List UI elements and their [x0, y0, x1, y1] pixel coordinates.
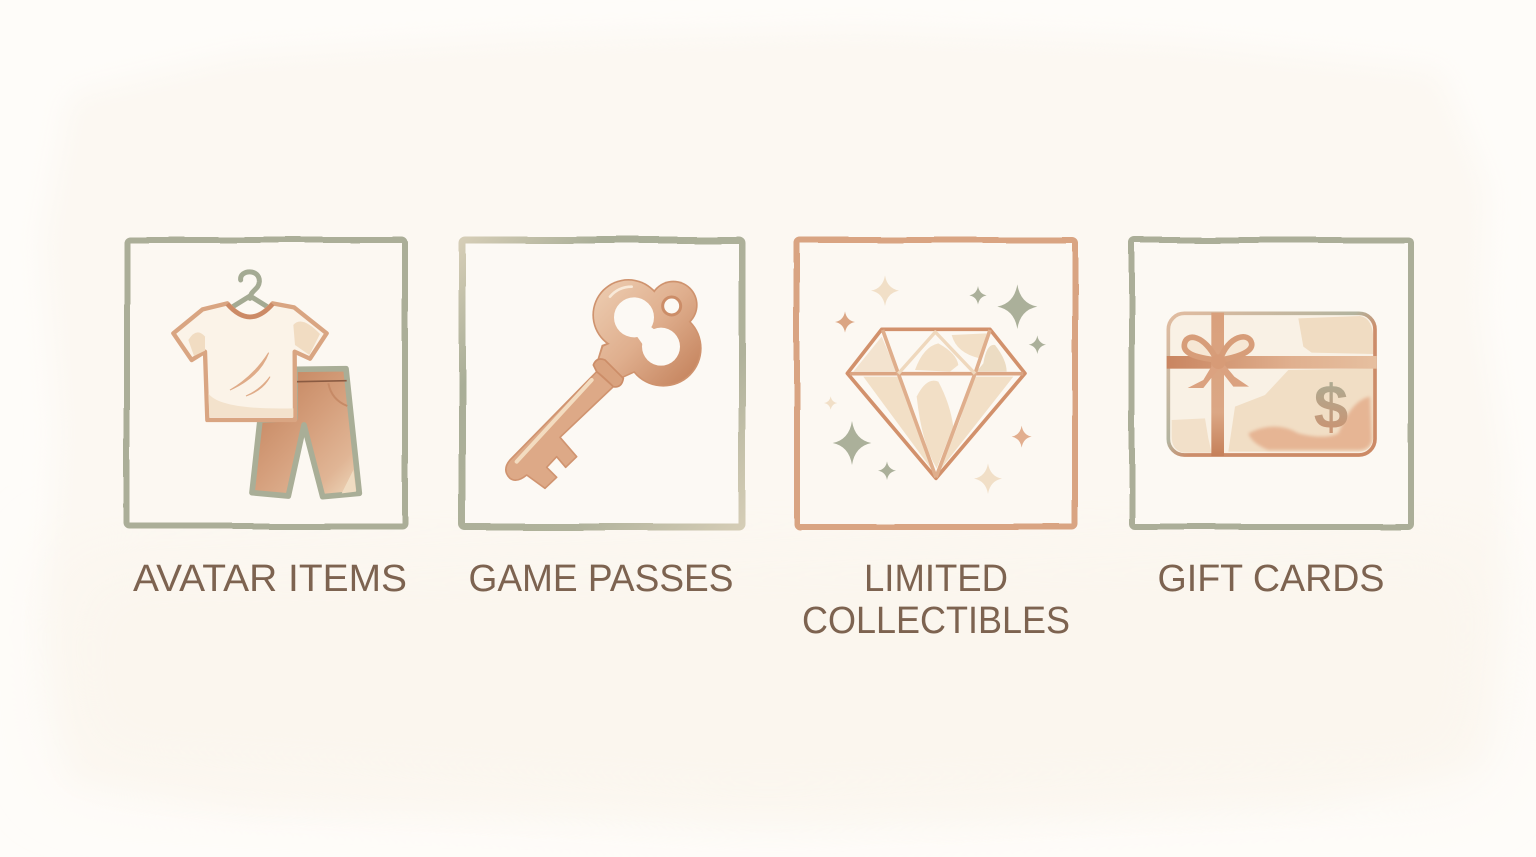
icon: diamond with sparkles — [824, 275, 1046, 494]
key bow — [592, 279, 702, 387]
key shaft highlight — [517, 380, 592, 462]
diamond watercolor fill — [853, 333, 1013, 472]
key collar — [593, 359, 623, 387]
card outline — [1168, 313, 1375, 455]
dollar symbol: $ — [1314, 374, 1348, 443]
label: gift cards: GIFT CARDS — [1158, 558, 1384, 600]
icon: key — [506, 279, 702, 488]
t-shirt — [173, 303, 327, 420]
panel: gift cards — [1132, 240, 1411, 600]
key highlight — [610, 287, 632, 297]
label: avatar items: AVATAR ITEMS — [133, 558, 407, 600]
key small hole — [663, 297, 681, 315]
frame: gift cards — [1132, 240, 1411, 527]
label: limited collectibles: LIMITED — [864, 558, 1008, 600]
card watercolor washes — [1172, 316, 1373, 453]
diamond outline — [847, 329, 1025, 478]
panel: limited collectibles — [797, 240, 1075, 642]
panel: avatar items — [127, 240, 407, 600]
label: game passes: GAME PASSES — [468, 558, 734, 600]
key shaft and bits — [506, 372, 613, 488]
panel: game passes — [462, 240, 742, 600]
card body — [1168, 313, 1375, 455]
frame: limited collectibles — [797, 240, 1075, 527]
ribbon — [1167, 313, 1377, 456]
sparkles — [824, 275, 1046, 494]
label: limited collectibles — [802, 558, 1070, 642]
frame: avatar items — [127, 240, 405, 526]
icon: shirt and pants on hanger — [173, 272, 359, 497]
frame: game passes — [462, 240, 742, 527]
pants — [252, 369, 359, 497]
icon: gift card — [1167, 313, 1377, 456]
hanger — [232, 272, 268, 307]
label: limited collectibles: COLLECTIBLES — [802, 600, 1070, 642]
